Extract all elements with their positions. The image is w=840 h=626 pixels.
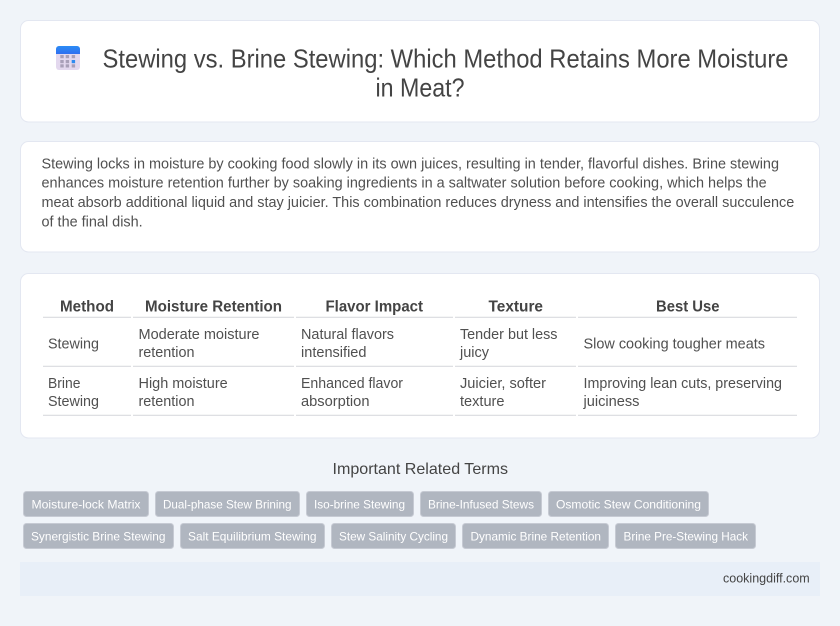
tag bbox=[306, 492, 414, 516]
table row: stewing: Slow cooking tougher meats bbox=[584, 336, 765, 352]
text block: summary: of the final dish. bbox=[42, 214, 143, 230]
tag: Moisture-lock Matrix bbox=[32, 497, 140, 511]
tag: Iso-brine Stewing bbox=[314, 497, 405, 511]
tag bbox=[332, 524, 456, 548]
table row: brine stewing: retention bbox=[138, 394, 194, 410]
tag: Stew Salinity Cycling bbox=[339, 529, 448, 543]
title bbox=[102, 46, 788, 102]
tag: Brine-Infused Stews bbox=[428, 497, 534, 511]
table row: stewing: retention bbox=[138, 345, 194, 361]
tag bbox=[180, 524, 324, 548]
table row: brine stewing: texture bbox=[460, 394, 504, 410]
table row: stewing: intensified bbox=[301, 345, 366, 361]
table header: Texture bbox=[488, 299, 543, 316]
panel: summary paragraph bbox=[20, 142, 820, 252]
table row: brine stewing: High moisture bbox=[138, 376, 228, 392]
tag: Dual-phase Stew Brining bbox=[163, 497, 292, 511]
table header: Moisture Retention bbox=[145, 299, 282, 316]
table row: stewing: Moderate moisture bbox=[138, 327, 260, 343]
tag bbox=[24, 492, 148, 516]
heading: important related terms: Important Related Terms bbox=[332, 461, 508, 478]
text block: summary: meat absorb additional liquid and stay juicier. This combination reduces dryness and intensifies the overall succulence bbox=[42, 195, 794, 211]
table row: brine stewing bbox=[43, 376, 797, 416]
tag: Osmotic Stew Conditioning bbox=[556, 497, 701, 511]
tag: Brine Pre-Stewing Hack bbox=[624, 529, 749, 543]
table row: brine stewing: Stewing bbox=[48, 394, 99, 410]
table row: stewing bbox=[43, 327, 797, 367]
table header bbox=[43, 299, 797, 318]
tag bbox=[548, 492, 708, 516]
table row: brine stewing: absorption bbox=[301, 394, 370, 410]
footer bar bbox=[20, 562, 820, 596]
tag bbox=[24, 524, 174, 548]
table row: brine stewing: Brine bbox=[48, 376, 80, 392]
tag: Synergistic Brine Stewing bbox=[31, 529, 166, 543]
panel: related term tags bbox=[24, 492, 756, 548]
footer source text: cookingdiff.com bbox=[723, 571, 810, 586]
tag: Dynamic Brine Retention bbox=[470, 529, 601, 543]
panel: title card bbox=[20, 20, 820, 122]
tag bbox=[420, 492, 542, 516]
table row: brine stewing: Improving lean cuts, preserving bbox=[584, 376, 782, 392]
text block: summary: Stewing locks in moisture by cooking food slowly in its own juices, resulting in tender, flavorful dishes. Brine stewing bbox=[42, 156, 779, 172]
table header: Method bbox=[60, 299, 114, 316]
text block: summary bbox=[42, 156, 794, 230]
title: in Meat? bbox=[376, 74, 464, 102]
table row: stewing: Natural flavors bbox=[301, 327, 394, 343]
table row: stewing: Stewing bbox=[48, 336, 99, 352]
table row: stewing: Tender but less bbox=[460, 327, 558, 343]
icon: calendar bbox=[56, 46, 80, 70]
text block: summary: enhances moisture retention further by soaking ingredients in a saltwater solution before cooking, which helps the bbox=[42, 175, 767, 191]
tag bbox=[156, 492, 300, 516]
panel: comparison table bbox=[20, 274, 820, 438]
tag bbox=[616, 524, 756, 548]
tag bbox=[462, 524, 608, 548]
tag: Salt Equilibrium Stewing bbox=[188, 529, 316, 543]
table row: brine stewing: juiciness bbox=[582, 394, 640, 410]
table row: brine stewing: Juicier, softer bbox=[460, 376, 546, 392]
table row: stewing: juicy bbox=[459, 345, 490, 361]
table header: Flavor Impact bbox=[326, 299, 424, 316]
title: Stewing vs. Brine Stewing: Which Method Retains More Moisture bbox=[102, 46, 788, 74]
table header: Best Use bbox=[656, 299, 720, 316]
table row: brine stewing: Enhanced flavor bbox=[301, 376, 403, 392]
